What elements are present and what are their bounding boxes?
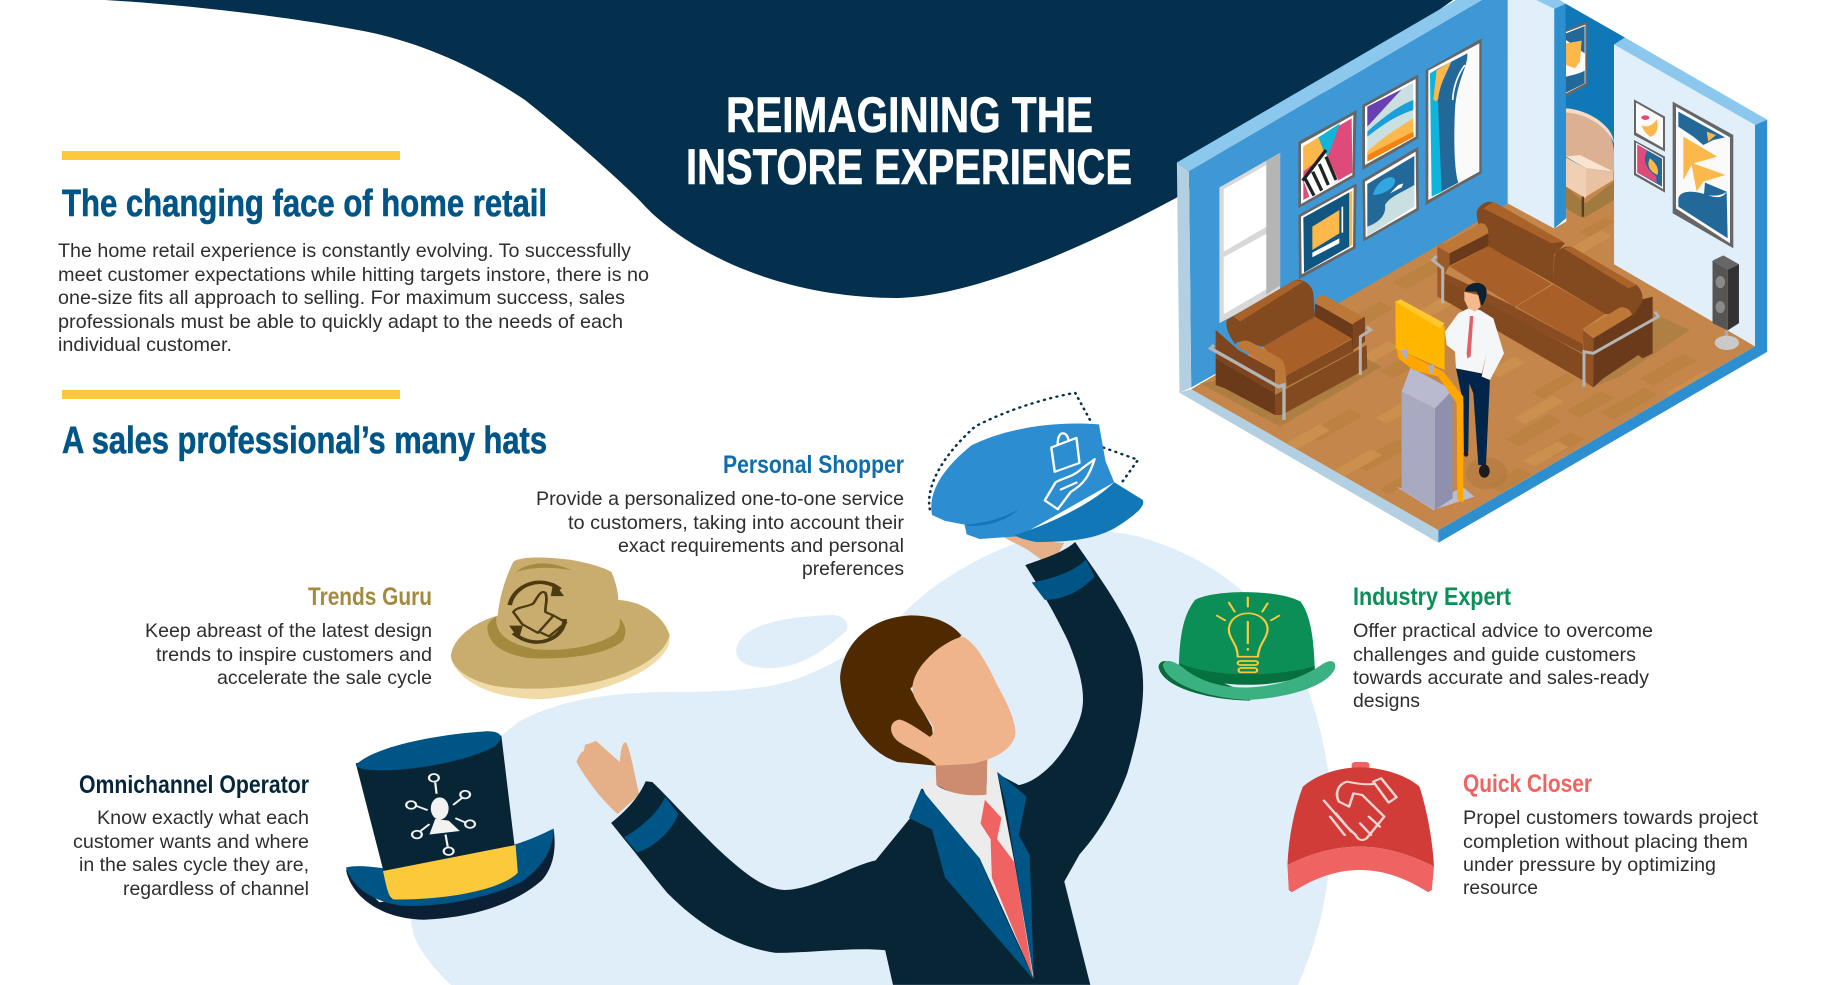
brim underside bbox=[451, 612, 669, 699]
left blue wall bbox=[1189, 0, 1508, 387]
intro section bbox=[58, 151, 649, 356]
window bbox=[1219, 153, 1280, 323]
crown crease bbox=[967, 509, 1019, 526]
picture: large tree bbox=[1673, 102, 1733, 248]
intro paragraph: meet customer expectations while hitting targets instore, there is no bbox=[58, 264, 649, 286]
back room chair bbox=[1566, 108, 1614, 217]
personal shopper text: Personal Shopper bbox=[723, 451, 904, 479]
crown shadow bbox=[1180, 663, 1315, 685]
trends guru text: trends to inspire customers and bbox=[156, 644, 432, 666]
quick closer text: Quick Closer bbox=[1463, 770, 1592, 798]
yellow rule bbox=[62, 151, 400, 160]
intro paragraph: The home retail experience is constantly evolving. To successfully bbox=[58, 240, 631, 262]
crown bbox=[931, 424, 1114, 539]
hats section heading bbox=[62, 390, 547, 462]
room shell bbox=[1177, 0, 1767, 543]
industry expert text: towards accurate and sales-ready bbox=[1353, 667, 1649, 689]
button bbox=[1352, 762, 1369, 773]
floor speaker bbox=[1713, 255, 1739, 350]
omnichannel text: regardless of channel bbox=[123, 878, 309, 900]
intro paragraph: professionals must be able to quickly adapt to the needs of each bbox=[58, 311, 623, 333]
picture: blue shapes bbox=[1362, 147, 1419, 242]
hair bbox=[840, 615, 962, 766]
brim bbox=[1287, 847, 1434, 892]
shopper figure bbox=[1445, 283, 1507, 489]
omnichannel text: Know exactly what each bbox=[97, 807, 309, 829]
intro paragraph bbox=[58, 240, 649, 356]
brim bbox=[1163, 661, 1335, 700]
omnichannel text: Omnichannel Operator bbox=[79, 771, 309, 799]
neck bbox=[935, 756, 988, 797]
floor planks bbox=[1224, 217, 1716, 494]
quick closer text: under pressure by optimizing bbox=[1463, 854, 1716, 876]
heading: many hats: A sales professional’s many hats bbox=[62, 420, 547, 462]
quick closer text: resource bbox=[1463, 877, 1538, 899]
heading: changing face: The changing face of home retail bbox=[62, 183, 547, 225]
tie bbox=[981, 800, 1033, 978]
title: INSTORE EXPERIENCE bbox=[686, 139, 1132, 195]
personal shopper text: to customers, taking into account their bbox=[568, 512, 905, 534]
face bbox=[891, 637, 1015, 766]
hat body bbox=[451, 557, 670, 689]
right lapel bbox=[997, 772, 1034, 980]
icon: bag in hand bbox=[1045, 433, 1095, 509]
peak bbox=[1014, 482, 1143, 542]
right cuff band bbox=[1032, 559, 1095, 600]
picture: back wall tree bbox=[1566, 22, 1587, 97]
industry expert text: designs bbox=[1353, 690, 1420, 712]
industry expert text: Industry Expert bbox=[1353, 583, 1512, 611]
kiosk bbox=[1395, 299, 1474, 510]
industry expert text: challenges and guide customers bbox=[1353, 644, 1636, 666]
picture: abstract stripes bbox=[1298, 110, 1357, 208]
hat band bbox=[487, 617, 625, 659]
intro paragraph: one-size fits all approach to selling. For maximum success, sales bbox=[58, 287, 625, 309]
yellow rule bbox=[62, 390, 400, 399]
omnichannel top hat bbox=[346, 731, 555, 920]
quick closer text bbox=[1463, 770, 1759, 899]
personal shopper text: Provide a personalized one-to-one service bbox=[536, 488, 904, 510]
icon: handshake bbox=[1324, 778, 1397, 840]
industry expert text: Offer practical advice to overcome bbox=[1353, 620, 1653, 642]
sofa bbox=[1433, 202, 1690, 387]
shirt bbox=[921, 760, 1034, 978]
trends guru text: accelerate the sale cycle bbox=[217, 667, 432, 689]
trends guru text: Trends Guru bbox=[308, 583, 432, 611]
personal shopper hat bbox=[929, 393, 1143, 542]
trends guru text: Keep abreast of the latest design bbox=[145, 620, 432, 642]
quick closer text: Propel customers towards project bbox=[1463, 807, 1759, 829]
personal shopper text: exact requirements and personal bbox=[618, 535, 904, 557]
crown bbox=[1287, 767, 1434, 867]
omnichannel text: customer wants and where bbox=[73, 831, 309, 853]
title: REIMAGINING THE bbox=[726, 87, 1093, 143]
floor base bbox=[1179, 389, 1438, 543]
trends guru text bbox=[145, 583, 432, 689]
picture: orange square bbox=[1298, 183, 1357, 279]
room illustration bbox=[1177, 0, 1767, 543]
intro paragraph: individual customer. bbox=[58, 334, 232, 356]
back room floor shadow bbox=[1566, 182, 1614, 218]
left lapel bbox=[909, 789, 1034, 980]
small blob bbox=[736, 615, 847, 668]
trends guru hat bbox=[451, 557, 670, 699]
wood floor bbox=[1191, 168, 1755, 530]
title bbox=[686, 87, 1132, 195]
omnichannel text bbox=[73, 771, 309, 900]
brim underside bbox=[346, 829, 555, 920]
icon: light bulb bbox=[1217, 597, 1279, 672]
shopper and kiosk bbox=[1395, 283, 1507, 510]
picture: waves bbox=[1362, 74, 1418, 170]
picture: small heart bbox=[1634, 99, 1665, 152]
armchair bbox=[1200, 280, 1382, 427]
gallery wall pictures bbox=[1298, 38, 1482, 279]
centre partition bbox=[1508, 0, 1554, 230]
left cuff band bbox=[624, 797, 678, 853]
right wall bbox=[1614, 37, 1767, 125]
quick closer red cap bbox=[1287, 762, 1434, 892]
brim shadow bbox=[1158, 661, 1250, 701]
back wall bbox=[1565, 4, 1625, 186]
icon: customer network bbox=[406, 774, 475, 855]
industry expert text bbox=[1353, 583, 1653, 712]
right wall pictures and back room bbox=[1566, 22, 1733, 248]
jacket bbox=[611, 542, 1143, 985]
quick closer text: completion without placing them bbox=[1463, 831, 1748, 853]
personal shopper text bbox=[536, 451, 905, 580]
brim top bbox=[346, 829, 554, 906]
crown bbox=[356, 735, 518, 899]
left hand bbox=[576, 741, 639, 814]
businessman figure bbox=[576, 530, 1143, 985]
icon: thumbs up cycle bbox=[510, 582, 566, 642]
dotted motion trail bbox=[929, 393, 1138, 509]
raised hand bbox=[997, 530, 1064, 561]
picture: small abstract bbox=[1634, 140, 1665, 193]
picture: tall blue bbox=[1426, 38, 1482, 205]
light blue blob bbox=[411, 531, 1331, 985]
omnichannel text: in the sales cycle they are, bbox=[79, 854, 309, 876]
industry expert green hat bbox=[1158, 592, 1335, 701]
crown top bbox=[356, 731, 501, 770]
personal shopper text: preferences bbox=[802, 558, 904, 580]
yellow band bbox=[383, 845, 518, 900]
crown bbox=[1179, 592, 1315, 681]
header wave shape bbox=[105, 0, 1453, 298]
